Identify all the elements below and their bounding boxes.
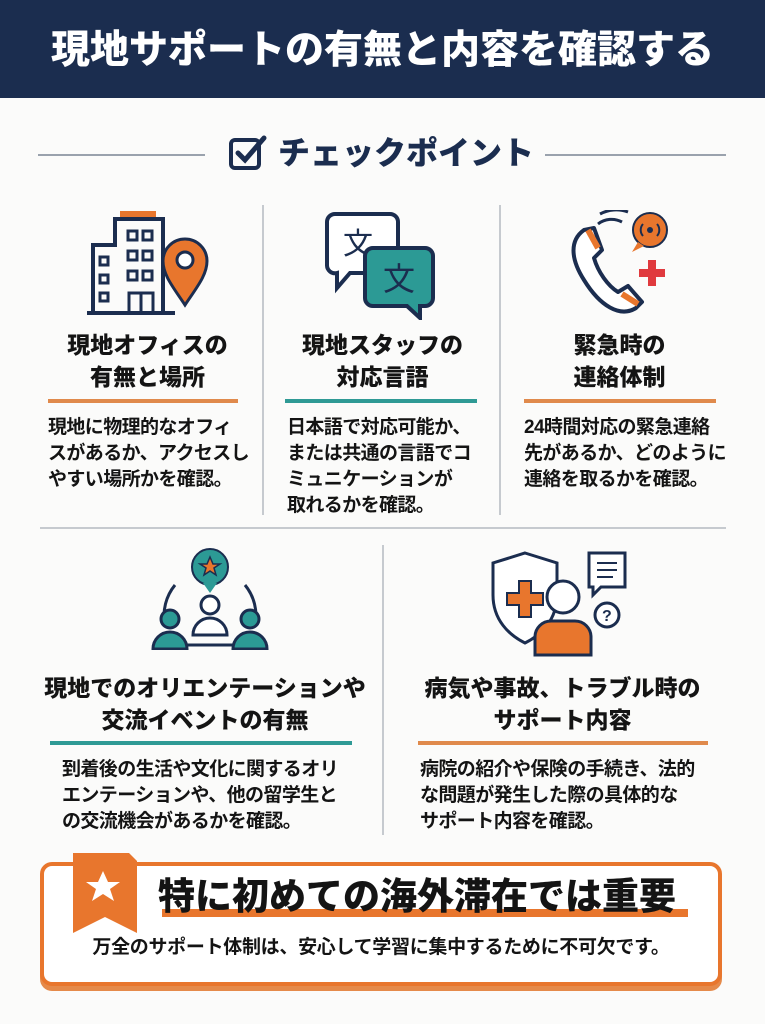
callout: important [40,862,722,986]
body text: 現地に物理的なオフィ [48,417,232,438]
panel: orientation [44,548,366,832]
body text: の交流機会があるかを確認。 [62,811,301,832]
heading: 現地でのオリエンテーションや [44,675,366,701]
body text [48,416,249,490]
body text: エンテーションや、他の留学生と [62,785,337,806]
heading [302,332,463,390]
body text: 先があるか、どのように [524,443,726,464]
heading: 緊急時の [574,332,666,358]
body text: 到着後の生活や文化に関するオリ [62,759,338,780]
header bar [0,0,765,98]
icon: checkbox [229,136,266,170]
icon: people network [152,548,268,650]
icon: translation bubbles [325,212,435,320]
body text [524,416,726,490]
heading [424,675,700,733]
heading: 現地オフィスの [67,332,228,358]
heading: 病気や事故、トラブル時の [424,675,700,701]
panel: trouble support [418,551,708,832]
body text: やすい場所かを確認。 [48,469,232,490]
heading [44,675,366,733]
panel: office [48,211,249,490]
body text: 日本語で対応可能か、 [287,417,471,438]
body text: 取れるかを確認。 [287,495,434,516]
icon: star ribbon [73,853,137,933]
body text: スがあるか、アクセスし [48,443,249,464]
body text [420,758,695,832]
heading [574,332,666,390]
body text: な問題が発生した際の具体的な [420,785,678,806]
icon: shield, person, bubbles: ? [602,608,612,625]
callout heading: 特に初めての海外滞在では重要 [158,876,676,917]
body text [62,758,338,832]
heading: 現地スタッフの [302,332,463,358]
heading: 交流イベントの有無 [102,707,308,733]
icon: shield, person, bubbles [492,551,626,656]
panel: emergency [524,210,726,490]
panel: language [285,212,477,516]
body text [287,416,471,516]
heading: 対応言語 [336,364,428,390]
heading: 有無と場所 [90,364,205,390]
checkpoint heading: チェックポイント [278,135,534,171]
heading: 連絡体制 [574,364,666,390]
body text: ミュニケーションが [287,469,452,490]
body text: 24時間対応の緊急連絡 [524,417,710,438]
title: 現地サポートの有無と内容を確認する [51,29,714,72]
callout text: 万全のサポート体制は、安心して学習に集中するために不可欠です。 [92,937,670,958]
body text: または共通の言語でコ [287,443,471,464]
dividers [262,205,264,515]
heading [67,332,228,390]
icon: building with pin [87,211,208,315]
body text: 病院の紹介や保険の手続き、法的 [420,759,695,780]
checkpoint heading [38,135,726,171]
body text: 連絡を取るかを確認。 [524,469,708,490]
body text: サポート内容を確認。 [420,811,604,832]
icon: translation bubbles: 文 [343,219,373,263]
icon: translation bubbles: 文 [383,254,415,300]
heading: サポート内容 [494,707,632,733]
icon: phone with alert [572,210,668,314]
